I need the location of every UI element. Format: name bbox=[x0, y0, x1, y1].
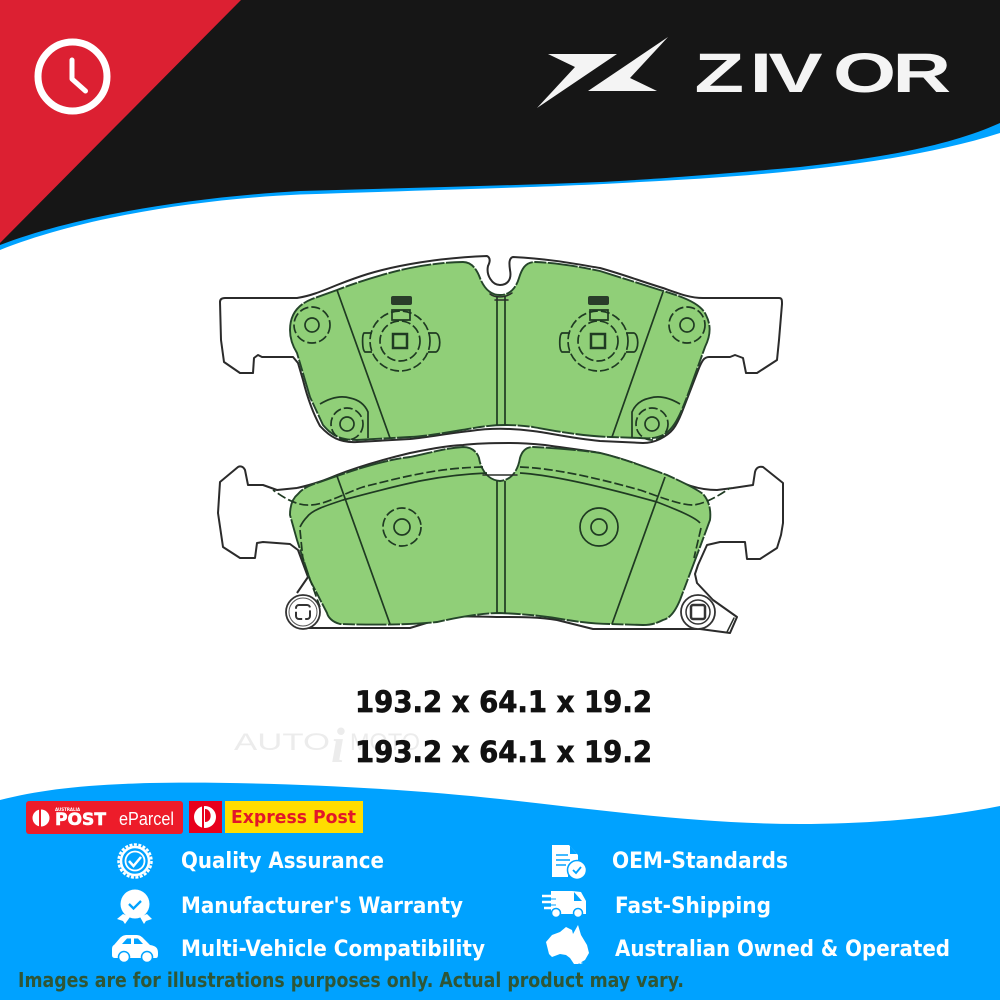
text: Australian Owned & Operated: Australian Owned & Operated bbox=[615, 937, 950, 962]
watermark: AUTO bbox=[234, 729, 330, 756]
top pad inner lines bbox=[337, 290, 663, 438]
dimensions line 2: 193.2 x 64.1 x 19.2 bbox=[355, 735, 652, 769]
top pad left bolt bbox=[363, 296, 440, 371]
icon: delivery van bbox=[542, 891, 586, 918]
bottom pad outline bbox=[297, 443, 783, 633]
badge: Australia Post eParcel: eParcel bbox=[119, 809, 174, 829]
bottom pad right clip bbox=[681, 595, 734, 632]
bottom pad left clip bbox=[286, 595, 320, 629]
icon: clock bbox=[38, 42, 107, 111]
logo wordmark: ZIVOR bbox=[695, 41, 951, 104]
bottom pad friction material bbox=[290, 447, 710, 625]
badge: Australia Post eParcel: POST bbox=[55, 810, 106, 830]
footer blue panel bbox=[0, 783, 1000, 1000]
icon: map of Australia bbox=[546, 925, 589, 964]
badge: Express Post bbox=[225, 801, 363, 833]
bottom pad rivets bbox=[383, 508, 618, 546]
badge: Express Post: Express Post bbox=[231, 807, 356, 828]
badge: Australia Post P logo bbox=[189, 801, 222, 833]
panel: bottom brake pad bbox=[218, 443, 783, 633]
icon: warranty ribbon bbox=[117, 890, 152, 924]
badge: Australia Post eParcel bbox=[26, 801, 183, 834]
dimensions line 1: 193.2 x 64.1 x 19.2 bbox=[355, 685, 652, 719]
bottom pad left lug outline bbox=[218, 466, 308, 593]
text: Manufacturer's Warranty: Manufacturer's Warranty bbox=[181, 894, 463, 919]
logo: ZIVOR bbox=[537, 37, 951, 108]
watermark bbox=[234, 717, 420, 773]
badge: Australia Post eParcel: AUSTRALIA bbox=[55, 807, 81, 812]
top pad corner rivets bbox=[294, 307, 705, 440]
text: Multi-Vehicle Compatibility: Multi-Vehicle Compatibility bbox=[181, 937, 485, 962]
disclaimer: Images are for illustrations purposes only. Actual product may vary. bbox=[18, 968, 684, 992]
panel: top brake pad bbox=[220, 256, 782, 443]
icon: document check bbox=[552, 845, 586, 880]
text: Quality Assurance: Quality Assurance bbox=[181, 849, 384, 874]
text: OEM-Standards: OEM-Standards bbox=[612, 849, 788, 874]
text: Fast-Shipping: Fast-Shipping bbox=[615, 894, 771, 919]
header black banner bbox=[0, 0, 1000, 245]
logo mark bbox=[537, 37, 668, 108]
icon: quality seal bbox=[118, 844, 152, 878]
watermark: i bbox=[331, 717, 345, 773]
bottom pad inner lines bbox=[337, 476, 665, 624]
watermark: MOTO bbox=[350, 729, 420, 756]
red corner triangle bbox=[0, 0, 241, 243]
header blue underline curve bbox=[0, 100, 1000, 250]
top pad outline bbox=[220, 256, 782, 443]
icon: car bbox=[112, 935, 158, 962]
bottom pad shim lines bbox=[273, 467, 483, 505]
top pad friction material bbox=[290, 262, 710, 440]
top pad right bolt bbox=[560, 296, 638, 371]
